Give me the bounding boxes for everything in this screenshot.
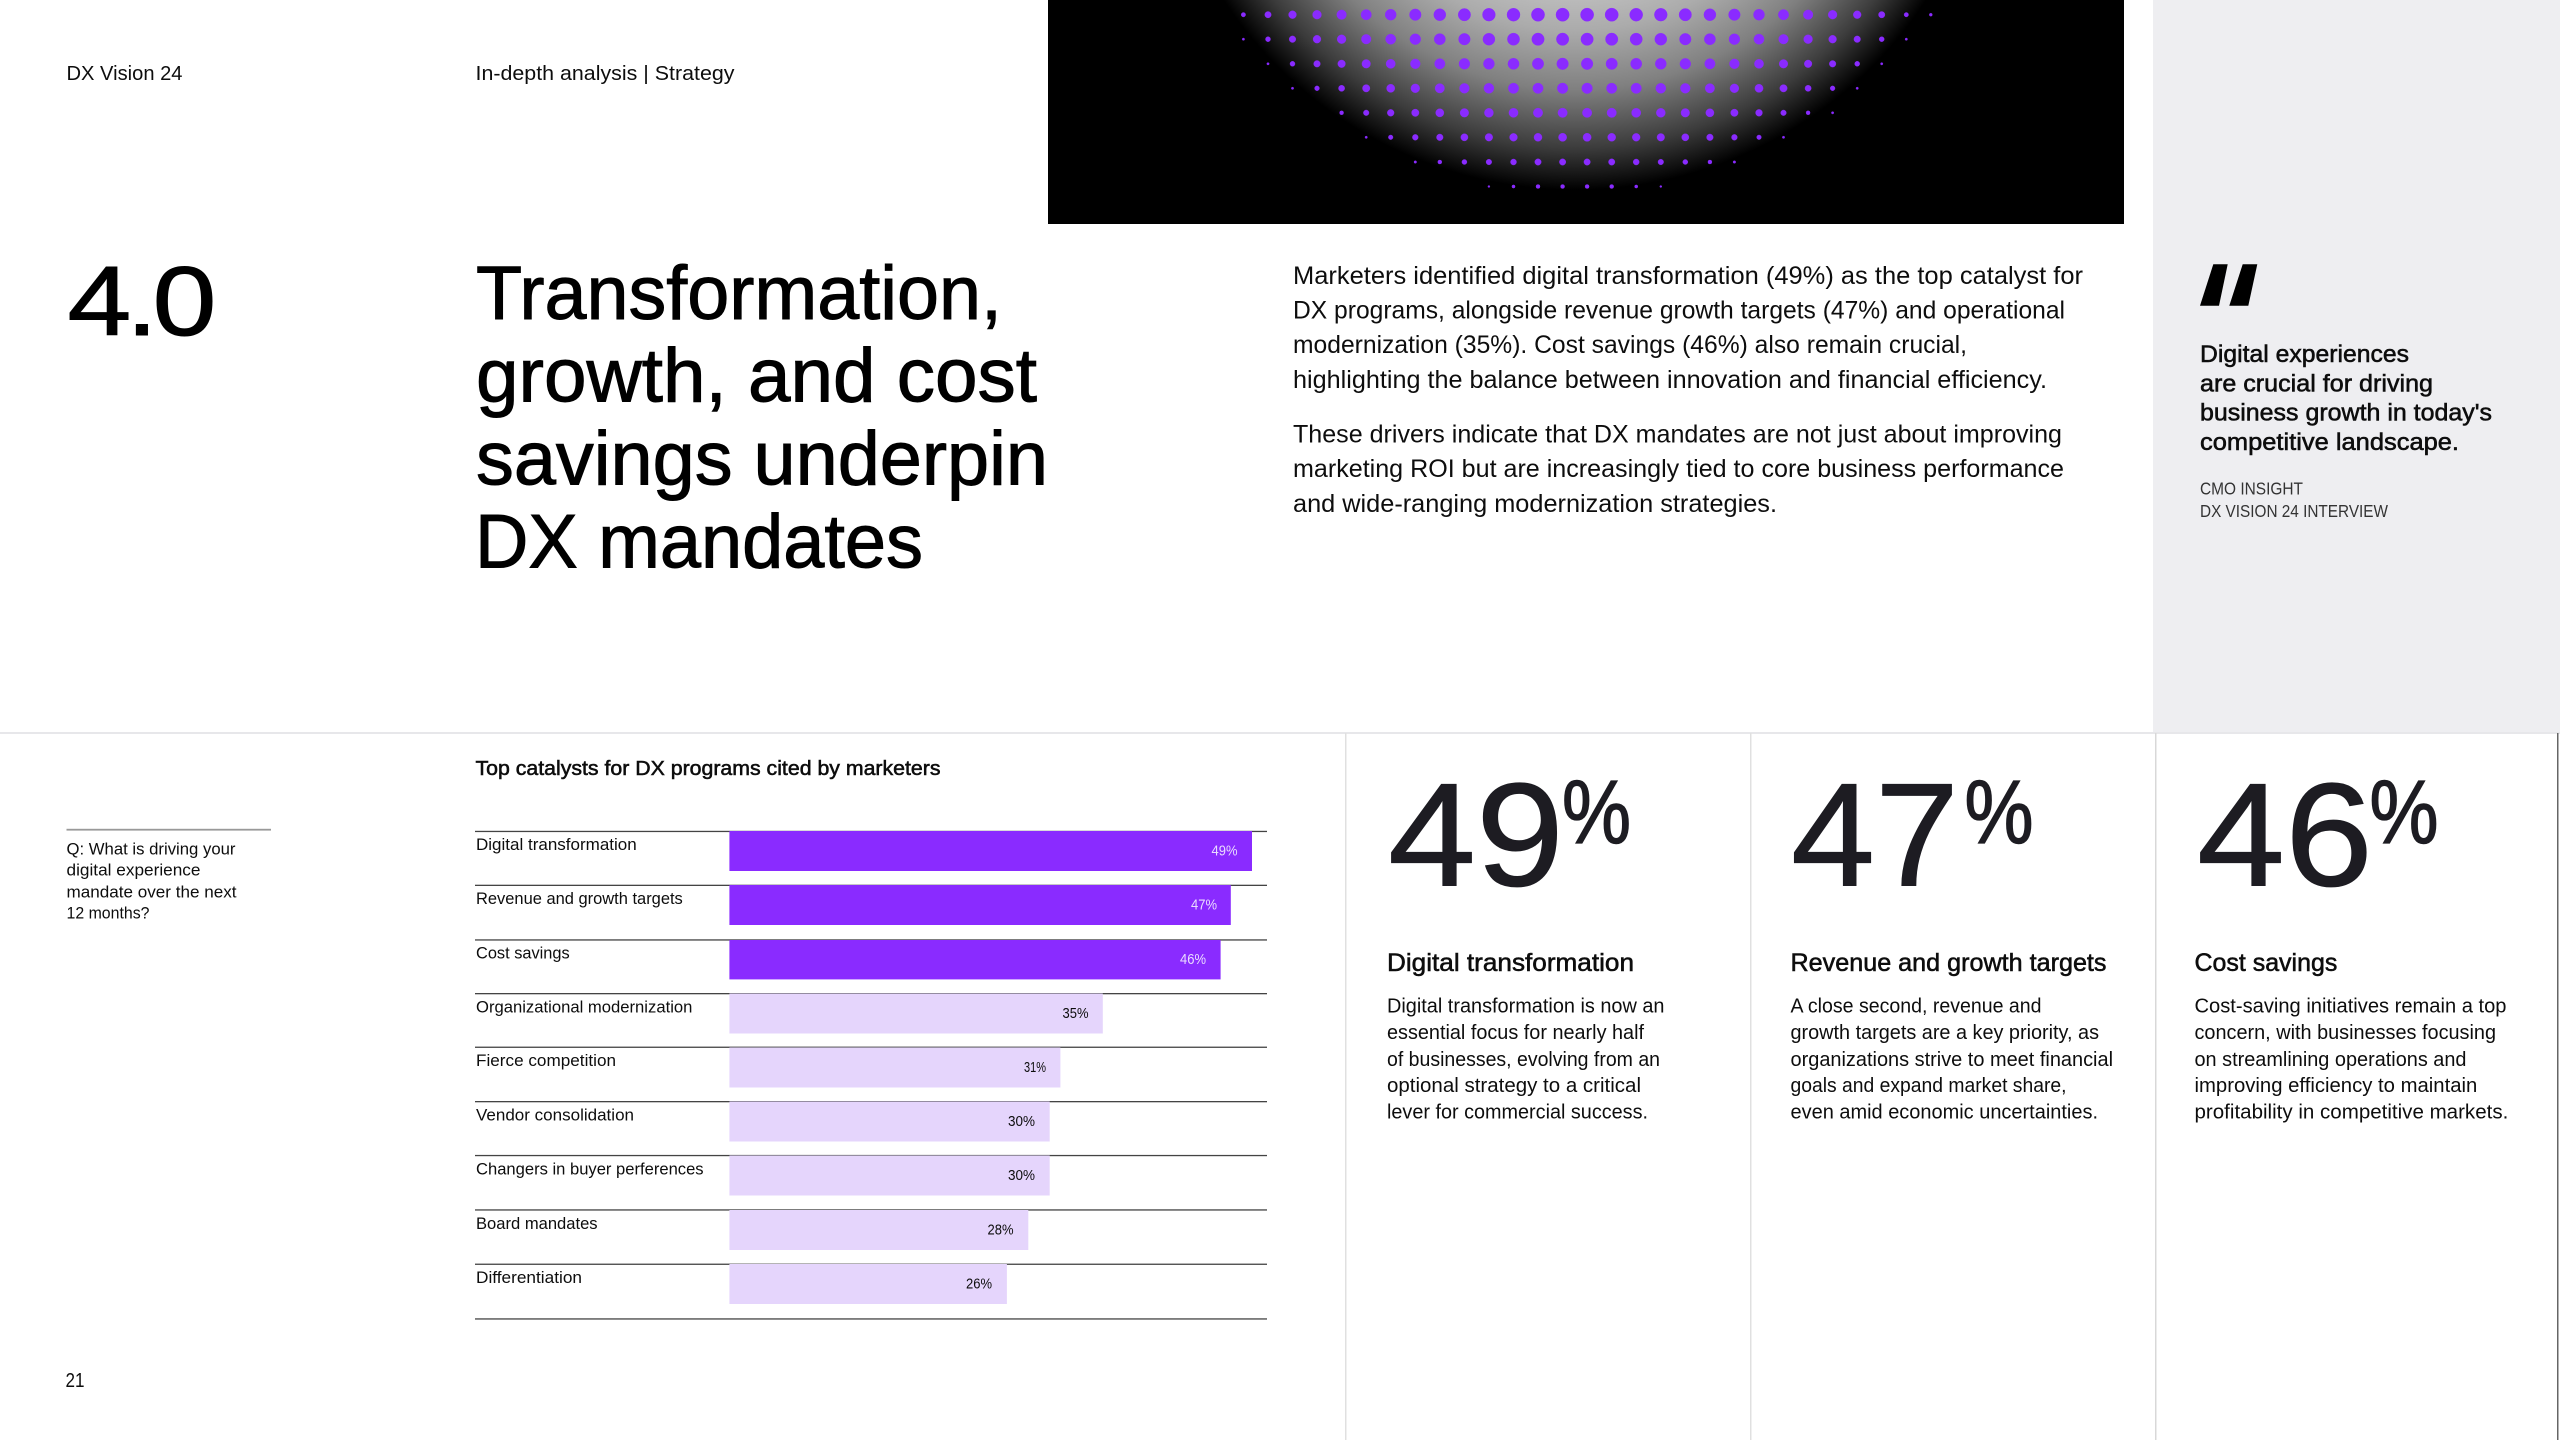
image: halftone dot glow — [1048, 0, 2124, 224]
bar: Revenue and growth targets: Revenue and growth targets — [476, 889, 683, 908]
quote attribution: CMO INSIGHT — [2200, 478, 2303, 498]
body text: profitability in competitive markets. — [2194, 1102, 2508, 1124]
quote text: competitive landscape. — [2200, 429, 2459, 456]
body text — [2194, 996, 2508, 1124]
heading: Cost savings — [2194, 949, 2337, 977]
bar: Fierce competition — [476, 1048, 1060, 1088]
body text: lever for commercial success. — [1387, 1102, 1648, 1124]
body text: Cost-saving initiatives remain a top — [2194, 996, 2506, 1018]
bar: Differentiation: Differentiation — [476, 1268, 582, 1287]
quote text: are crucial for driving — [2200, 370, 2433, 398]
body text: goals and expand market share, — [1790, 1075, 2066, 1097]
bar: Revenue and growth targets: 47% — [1191, 898, 1217, 914]
panel: stat cost savings — [2194, 754, 2508, 1124]
bar chart: top catalysts — [475, 831, 1267, 1320]
section number: 4.0 — [68, 246, 213, 356]
stat number 46% — [2197, 754, 2438, 918]
stat number 49%: % — [1562, 763, 1631, 863]
stat number 47%: % — [1964, 763, 2034, 863]
stat number 49% — [1388, 754, 1631, 918]
panel: stat digital transformation — [1387, 754, 1664, 1124]
quote attribution: DX VISION 24 INTERVIEW — [2200, 501, 2388, 521]
panel: quote background — [2153, 0, 2560, 733]
quote text: Digital experiences — [2200, 341, 2409, 368]
title — [475, 251, 1048, 584]
header: section name: In-depth analysis | Strategy — [476, 62, 735, 85]
bar: Organizational modernization: 35% — [1062, 1006, 1089, 1022]
body text: on streamlining operations and — [2194, 1049, 2466, 1071]
bar: Cost savings — [476, 940, 1221, 979]
bar: Differentiation: 26% — [966, 1276, 992, 1292]
survey question — [66, 829, 271, 923]
bar: Revenue and growth targets — [476, 885, 1231, 925]
bar: Vendor consolidation — [476, 1102, 1050, 1142]
text block: intro paragraphs — [1293, 262, 2083, 518]
body text: of businesses, evolving from an — [1387, 1049, 1660, 1071]
bar: Cost savings: Cost savings — [476, 944, 570, 962]
body text: Digital transformation is now an — [1387, 996, 1664, 1018]
body text — [1387, 996, 1664, 1124]
stat number 47%: 47 — [1791, 754, 1959, 918]
stat number 49%: 49 — [1388, 754, 1564, 918]
bar: Vendor consolidation: 30% — [1008, 1114, 1035, 1130]
text block: intro paragraphs: Marketers identified digital transformation (49%) as the top catalyst for — [1293, 262, 2083, 290]
stat number 47% — [1791, 754, 2034, 918]
quote text: business growth in today's — [2200, 400, 2492, 426]
stat number 46%: 46 — [2197, 754, 2373, 918]
bar: Fierce competition: Fierce competition — [476, 1051, 616, 1070]
bar: Digital transformation: Digital transformation — [476, 835, 637, 854]
title: DX mandates — [475, 500, 923, 584]
body text: essential focus for nearly half — [1387, 1022, 1644, 1044]
text block: intro paragraphs: highlighting the balance between innovation and financial efficiency. — [1293, 366, 2047, 394]
bar: Changers in buyer perferences: 30% — [1008, 1168, 1035, 1184]
survey question: Q: What is driving your — [66, 839, 236, 858]
body text: growth targets are a key priority, as — [1790, 1022, 2099, 1044]
stat number 46%: % — [2370, 763, 2438, 863]
body text: optional strategy to a critical — [1387, 1075, 1641, 1097]
bar: Cost savings: 46% — [1180, 952, 1206, 968]
body text — [1790, 996, 2113, 1124]
survey question: digital experience — [66, 861, 200, 880]
heading: Digital transformation — [1387, 949, 1634, 977]
text block: intro paragraphs: and wide-ranging modernization strategies. — [1293, 490, 1777, 518]
bar: Board mandates: 28% — [988, 1222, 1014, 1238]
bar: Changers in buyer perferences: Changers in buyer perferences — [476, 1160, 704, 1178]
title: growth, and cost — [476, 334, 1037, 418]
bar: Differentiation — [476, 1264, 1007, 1304]
panel: stat revenue and growth targets — [1790, 754, 2113, 1124]
bar: Organizational modernization — [476, 994, 1103, 1034]
bar: Digital transformation — [476, 831, 1252, 871]
body text: organizations strive to meet financial — [1790, 1049, 2113, 1071]
heading: Revenue and growth targets — [1790, 949, 2106, 977]
text block: intro paragraphs: modernization (35%). Cost savings (46%) also remain crucial, — [1293, 331, 1967, 359]
chart title: Top catalysts for DX programs cited by marketers — [476, 757, 940, 780]
quote attribution — [2200, 478, 2388, 521]
bar: Organizational modernization: Organizational modernization — [476, 998, 692, 1016]
quote text — [2200, 341, 2492, 456]
bar: Vendor consolidation: Vendor consolidation — [476, 1106, 634, 1124]
bar: Changers in buyer perferences — [476, 1156, 1050, 1196]
text block: intro paragraphs: These drivers indicate that DX mandates are not just about improving — [1293, 420, 2062, 448]
bar: Fierce competition: 31% — [1024, 1060, 1046, 1076]
header: report name: DX Vision 24 — [66, 62, 182, 85]
bar: Board mandates: Board mandates — [476, 1214, 598, 1233]
title: Transformation, — [476, 251, 1002, 336]
title: savings underpin — [476, 416, 1048, 502]
body text: concern, with businesses focusing — [2194, 1022, 2496, 1044]
bar: Digital transformation: 49% — [1212, 844, 1238, 860]
bar: Board mandates — [476, 1210, 1028, 1250]
body text: improving efficiency to maintain — [2194, 1075, 2477, 1097]
survey question: mandate over the next — [66, 882, 237, 901]
icon: quotation mark — [2200, 264, 2257, 306]
text block: intro paragraphs: DX programs, alongside revenue growth targets (47%) and operational — [1293, 296, 2065, 324]
body text: A close second, revenue and — [1790, 996, 2042, 1018]
survey question: 12 months? — [66, 904, 150, 923]
page number: 21 — [66, 1370, 84, 1392]
body text: even amid economic uncertainties. — [1790, 1102, 2098, 1124]
text block: intro paragraphs: marketing ROI but are increasingly tied to core business performance — [1293, 455, 2064, 483]
